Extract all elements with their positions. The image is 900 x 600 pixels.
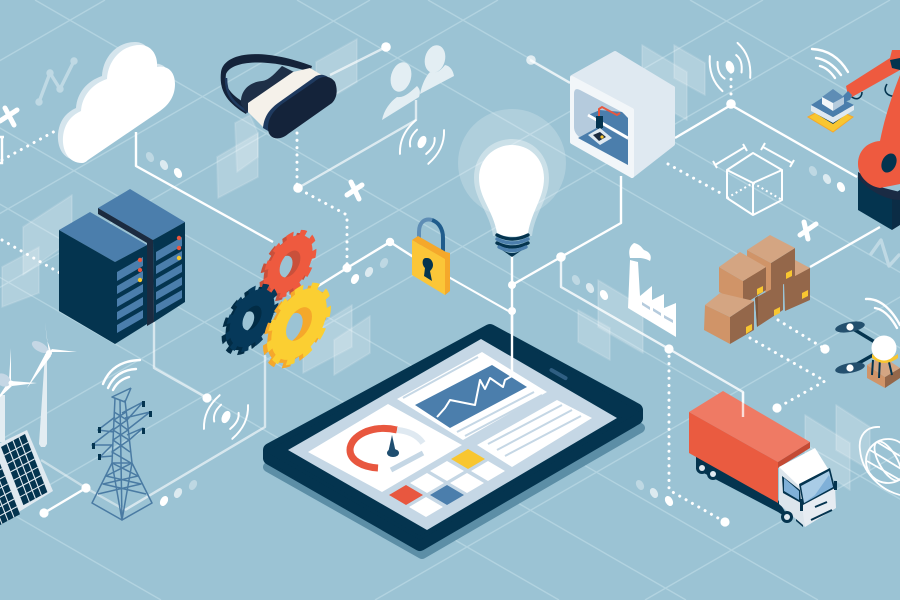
dashboard tiles <box>389 449 505 517</box>
icon: globe <box>860 427 900 495</box>
gauge panel <box>308 404 462 492</box>
icon: padlock <box>412 220 450 295</box>
icon: yellow gear <box>266 273 328 378</box>
connector lines <box>41 47 880 513</box>
icon: cardboard boxes <box>704 235 810 344</box>
icon: delivery truck <box>689 391 837 527</box>
icon: wireless signal lower <box>200 391 252 443</box>
icon: x mark left <box>0 108 17 125</box>
icon: delivery drone <box>834 319 900 388</box>
chart panel strips <box>457 392 542 436</box>
translucent floating panels <box>2 39 870 490</box>
chart panel <box>397 352 547 440</box>
icon: factory <box>628 243 676 337</box>
icon: wireless signal top <box>396 116 448 168</box>
chart area <box>415 365 527 428</box>
icon: wireframe cube <box>713 143 794 215</box>
icon: electricity pylon <box>92 388 152 520</box>
icon: x mark centre <box>347 182 362 199</box>
icon: measure bracket left <box>0 137 4 163</box>
icon: tower wifi <box>103 360 140 390</box>
text panel <box>477 400 592 467</box>
line into truck <box>742 392 744 417</box>
icon: x mark right <box>800 222 816 239</box>
icon: cloud <box>58 42 175 163</box>
connector node dots <box>39 42 830 527</box>
tablet screen <box>288 339 617 530</box>
icon: solar panels <box>0 430 53 527</box>
icon: dark gear <box>224 277 276 362</box>
line into tablet <box>511 311 513 374</box>
icon: wireless signal printer <box>705 41 755 93</box>
tablet <box>263 331 643 554</box>
icon: wind turbines <box>0 322 77 447</box>
dotted connector lines <box>2 72 825 522</box>
icon: red gear <box>262 223 314 308</box>
icon: robot gripper wifi <box>812 49 848 78</box>
tablet body <box>263 331 643 551</box>
icon: users <box>382 43 454 120</box>
icon: 3D printer <box>572 53 673 176</box>
gauge <box>350 428 423 470</box>
icon: server racks <box>59 189 185 344</box>
chart trend line <box>437 376 512 417</box>
tablet shadow <box>268 345 640 554</box>
icon: faint chart right <box>871 240 899 266</box>
text panel strips <box>488 405 581 456</box>
tablet camera slot <box>551 370 566 378</box>
ellipsis dots <box>144 151 847 507</box>
icon: small line chart <box>37 59 76 104</box>
icon: light bulb <box>458 109 566 257</box>
icon: robot arm <box>808 50 900 230</box>
chart panel top strip <box>403 357 478 398</box>
icon: VR headset <box>221 54 337 138</box>
icon: drone wifi <box>866 299 900 328</box>
